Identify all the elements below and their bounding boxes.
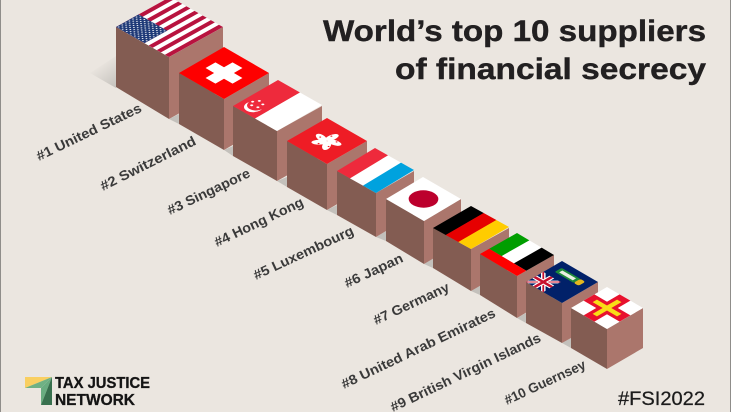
label: #6 Japan: #6 Japan — [342, 250, 405, 291]
logo text: NETWORK — [55, 392, 136, 409]
label: #3 Singapore: #3 Singapore — [165, 165, 253, 218]
logo text — [55, 375, 150, 409]
flag: United States — [116, 0, 223, 57]
cube: Switzerland — [179, 47, 269, 150]
flag: Luxembourg — [337, 148, 414, 193]
logo: Tax Justice Network — [25, 375, 150, 409]
logo text: TAX JUSTICE — [55, 375, 150, 392]
cube: Singapore — [233, 80, 322, 181]
flag: Hong Kong — [287, 118, 367, 164]
flag: United Arab Emirates — [480, 233, 554, 276]
cube: British Virgin Islands — [526, 261, 598, 343]
cube: United Arab Emirates — [480, 233, 554, 318]
cube: Japan — [386, 177, 461, 264]
label: #10 Guernsey: #10 Guernsey — [502, 357, 588, 408]
label: #2 Switzerland: #2 Switzerland — [98, 133, 198, 194]
cube: Luxembourg — [337, 148, 414, 237]
title: World’s top 10 suppliers — [323, 15, 706, 48]
label: #8 United Arab Emirates: #8 United Arab Emirates — [339, 305, 498, 392]
flag: Japan — [386, 177, 461, 221]
flag: Germany — [433, 206, 509, 249]
title: of financial secrecy — [395, 53, 706, 86]
label: #1 United States: #1 United States — [34, 100, 144, 164]
flag: Switzerland — [179, 47, 269, 99]
flag: Singapore — [233, 80, 322, 131]
flag: Guernsey — [571, 287, 643, 329]
cube: Guernsey — [571, 287, 643, 369]
label: #5 Luxembourg: #5 Luxembourg — [251, 223, 356, 283]
flag: British Virgin Islands — [526, 261, 598, 303]
label: #7 Germany: #7 Germany — [371, 279, 452, 328]
label: #4 Hong Kong: #4 Hong Kong — [212, 194, 306, 250]
hashtag: #FSI2022 — [618, 389, 705, 410]
cube: Hong Kong — [287, 118, 367, 210]
cube: Germany — [433, 206, 509, 291]
icon: logo mark — [25, 377, 52, 405]
title — [323, 15, 706, 86]
cube: United States — [116, 0, 223, 119]
